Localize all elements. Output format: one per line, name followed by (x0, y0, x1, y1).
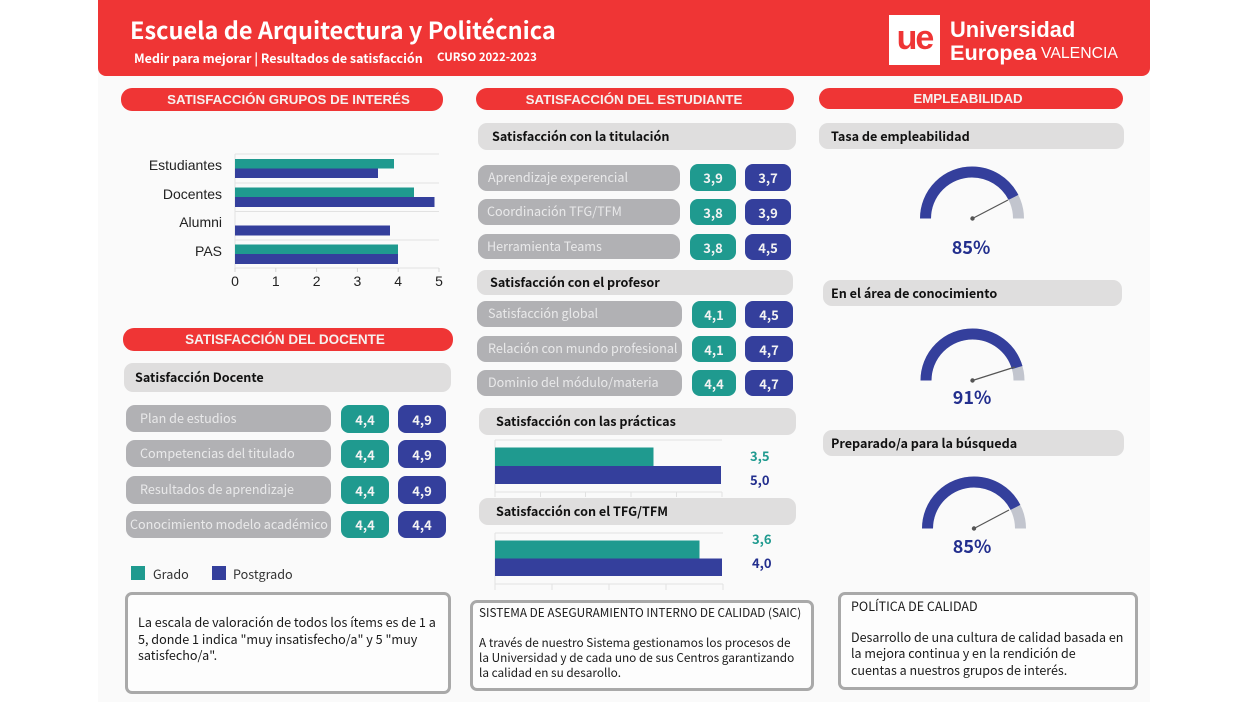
note body (851, 627, 1123, 679)
legend label: postgrado: Postgrado (233, 564, 293, 583)
value: TFG/TFM grado: 3,6 (752, 529, 772, 548)
value: aprendizaje postgrado (745, 164, 791, 191)
subheading: en el área de conocimiento (823, 280, 1122, 306)
subheading: en el área de conocimiento: En el área de conocimiento (831, 282, 997, 302)
row: herramienta teams: Herramienta Teams (487, 236, 602, 254)
heading: satisfacción grupos de interés (121, 88, 443, 111)
row: resultados de aprendizaje: Resultados de aprendizaje (140, 479, 294, 498)
value: resultados grado: 4,4 (355, 480, 375, 500)
heading: satisfacción del docente: SATISFACCIÓN DEL DOCENTE (185, 332, 385, 347)
value: relación grado (692, 336, 736, 362)
note body: cuentas a nuestros grupos de interés. (851, 660, 1067, 679)
row: dominio del módulo/materia: Dominio del módulo/materia (488, 372, 659, 391)
subheading: satisfacción con el profesor: Satisfacción con el profesor (490, 272, 660, 291)
value: conocimiento grado (341, 511, 389, 538)
bar chart: grupos de interés: 5 (435, 273, 443, 289)
row: plan de estudios: Plan de estudios (140, 408, 237, 426)
note: escala de valoración: 5, donde 1 indica "muy insatisfecho/a" y 5 "muy (138, 628, 417, 648)
value: herramienta postgrado (745, 234, 791, 260)
value: relación postgrado: 4,7 (759, 340, 779, 358)
value: dominio grado: 4,4 (704, 374, 724, 392)
value: aprendizaje grado: 3,9 (703, 168, 723, 187)
value: prácticas postgrado: 5,0 (750, 470, 770, 489)
gauge value: 85%: 85% (952, 234, 990, 260)
value: aprendizaje grado (690, 164, 736, 191)
row: dominio del módulo/materia (477, 370, 682, 396)
gauge: área de conocimiento (920, 328, 1024, 383)
note: política de calidad (838, 592, 1138, 690)
value: competencias postgrado (398, 440, 446, 468)
heading: satisfacción grupos de interés: SATISFACCIÓN GRUPOS DE INTERÉS (167, 92, 410, 107)
value: aprendizaje postgrado: 3,7 (758, 168, 778, 187)
row: resultados de aprendizaje (126, 476, 331, 504)
value: plan de estudios grado: 4,4 (355, 410, 375, 428)
note heading: SISTEMA DE ASEGURAMIENTO INTERNO DE CALIDAD (SAIC) (479, 604, 801, 621)
gauge: tasa de empleabilidad (920, 166, 1024, 221)
subheading: satisfacción docente: Satisfacción Docente (135, 367, 264, 386)
row: coordinación TFG/TFM: Coordinación TFG/TFM (487, 201, 622, 220)
value: relación grado: 4,1 (704, 340, 724, 358)
logo: Universidad Europea Valencia (889, 15, 1118, 65)
bar chart: grupos de interés: Estudiantes (149, 157, 222, 173)
note body: la calidad en su desarollo. (479, 664, 621, 681)
heading: satisfacción del estudiante: SATISFACCIÓN DEL ESTUDIANTE (526, 92, 742, 106)
row: satisfacción global (477, 301, 682, 327)
value: dominio postgrado: 4,7 (759, 374, 779, 392)
note: escala de valoración: La escala de valoración de todos los ítems es de 1 a (138, 612, 436, 631)
heading: satisfacción del docente (123, 328, 453, 351)
subheading: tasa de empleabilidad: Tasa de empleabilidad (831, 126, 970, 144)
bar chart: grupos de interés: PAS (195, 243, 222, 259)
logo wordmark city: VALENCIA (1041, 45, 1118, 62)
title: Escuela de Arquitectura y Politécnica (130, 12, 556, 46)
note body: la Universidad y de cada uno de sus Centros garantizando (479, 649, 794, 666)
row: aprendizaje experencial (478, 165, 680, 191)
value: coordinación postgrado: 3,9 (758, 202, 778, 222)
value: conocimiento grado: 4,4 (355, 515, 375, 534)
logo mark: ue (897, 19, 932, 57)
bar chart: prácticas (494, 440, 722, 497)
value: resultados grado (341, 476, 389, 504)
row: satisfacción global: Satisfacción global (488, 303, 598, 322)
legend label: grado: Grado (153, 564, 189, 583)
value: global postgrado: 4,5 (759, 305, 779, 324)
note: escala de valoración: satisfecho/a". (138, 645, 217, 664)
value: global postgrado (745, 301, 793, 328)
row: herramienta teams (478, 234, 680, 259)
bar chart: grupos de interés: 4 (394, 273, 402, 289)
gauge: preparado/a para la búsqueda (922, 476, 1026, 531)
subheading: satisfacción con la titulación: Satisfacción con la titulación (492, 126, 669, 145)
logo wordmark top: Universidad (950, 17, 1075, 42)
legend swatch: grado (131, 566, 145, 580)
note body: la mejora continua y en la rendición de (851, 643, 1076, 662)
logo wordmark bottom: Europea (950, 40, 1037, 65)
legend (131, 564, 293, 583)
value: global grado (692, 301, 736, 328)
value: competencias grado (341, 440, 389, 468)
note body: Desarrollo de una cultura de calidad basada en (851, 627, 1123, 646)
value: dominio postgrado (745, 370, 793, 396)
heading: satisfacción del estudiante (476, 88, 794, 110)
row: competencias del titulado (126, 440, 331, 467)
subtitle: Medir para mejorar | Resultados de satisfacción (134, 48, 423, 67)
value: coordinación grado (690, 199, 736, 225)
subheading: tasa de empleabilidad (819, 123, 1124, 149)
note: sistema de aseguramiento interno de calidad (470, 600, 814, 691)
value: TFG/TFM postgrado: 4,0 (752, 553, 772, 572)
gauge value: 85%: 85% (953, 533, 991, 559)
value: dominio grado (692, 370, 736, 396)
value: herramienta postgrado: 4,5 (758, 238, 778, 256)
subheading: preparado/a para la búsqueda: Preparado/a para la búsqueda (831, 432, 1017, 452)
row: aprendizaje experencial: Aprendizaje experencial (488, 167, 628, 186)
bar chart: grupos de interés: 3 (354, 273, 362, 289)
subheading: satisfacción con el TFG/TFM (479, 498, 796, 525)
header banner (98, 0, 1150, 76)
value: relación postgrado (745, 336, 793, 362)
value: prácticas grado: 3,5 (750, 446, 770, 465)
value: coordinación postgrado (745, 199, 791, 225)
note: escala de valoración (125, 592, 451, 694)
value: coordinación grado: 3,8 (703, 202, 723, 222)
subheading: satisfacción con el profesor (477, 270, 793, 295)
value: competencias grado: 4,4 (355, 444, 375, 464)
row: competencias del titulado: Competencias del titulado (140, 442, 295, 462)
value: conocimiento postgrado: 4,4 (412, 515, 432, 534)
bar chart: grupos de interés (149, 154, 443, 289)
bar chart: grupos de interés: 1 (272, 273, 280, 289)
value: competencias postgrado: 4,9 (412, 444, 432, 464)
subheading: satisfacción con las prácticas: Satisfacción con las prácticas (496, 411, 676, 430)
bar chart: grupos de interés: Alumni (179, 214, 222, 230)
value: global grado: 4,1 (704, 305, 724, 324)
value: resultados postgrado (398, 476, 446, 504)
value: resultados postgrado: 4,9 (412, 480, 432, 500)
heading: empleabilidad (819, 88, 1123, 109)
value: plan de estudios postgrado (398, 405, 446, 433)
row: relación con mundo profesional: Relación con mundo profesional (488, 338, 678, 357)
note heading: POLÍTICA DE CALIDAD (851, 596, 978, 615)
row: relación con mundo profesional (477, 336, 682, 362)
note body (479, 634, 794, 681)
logo mark (889, 15, 940, 65)
row: coordinación TFG/TFM (478, 199, 680, 225)
value: plan de estudios grado (341, 405, 389, 433)
subheading: satisfacción docente (124, 363, 451, 392)
value: herramienta grado: 3,8 (703, 238, 723, 256)
gauge value: 91%: 91% (953, 384, 991, 410)
subheading: satisfacción con la titulación (478, 123, 796, 150)
row: conocimiento modelo académico: Conocimiento modelo académico (130, 514, 328, 532)
row: conocimiento modelo académico (126, 511, 331, 538)
value: herramienta grado (690, 234, 736, 260)
subheading: satisfacción con las prácticas (479, 408, 796, 435)
value: plan de estudios postgrado: 4,9 (412, 410, 432, 428)
bar chart: TFG/TFM (494, 532, 724, 590)
subheading: preparado/a para la búsqueda (823, 430, 1124, 456)
value: conocimiento postgrado (398, 511, 446, 538)
bar chart: grupos de interés: 2 (313, 273, 321, 289)
subheading: satisfacción con el TFG/TFM: Satisfacción con el TFG/TFM (496, 501, 668, 520)
row: plan de estudios (126, 405, 331, 432)
bar chart: grupos de interés: 0 (231, 273, 239, 289)
bar chart: grupos de interés: Docentes (163, 186, 222, 202)
note body: A través de nuestro Sistema gestionamos los procesos de (479, 634, 791, 651)
legend swatch: postgrado (212, 566, 226, 580)
course label: CURSO 2022-2023 (437, 49, 537, 65)
heading: empleabilidad: EMPLEABILIDAD (913, 91, 1023, 106)
